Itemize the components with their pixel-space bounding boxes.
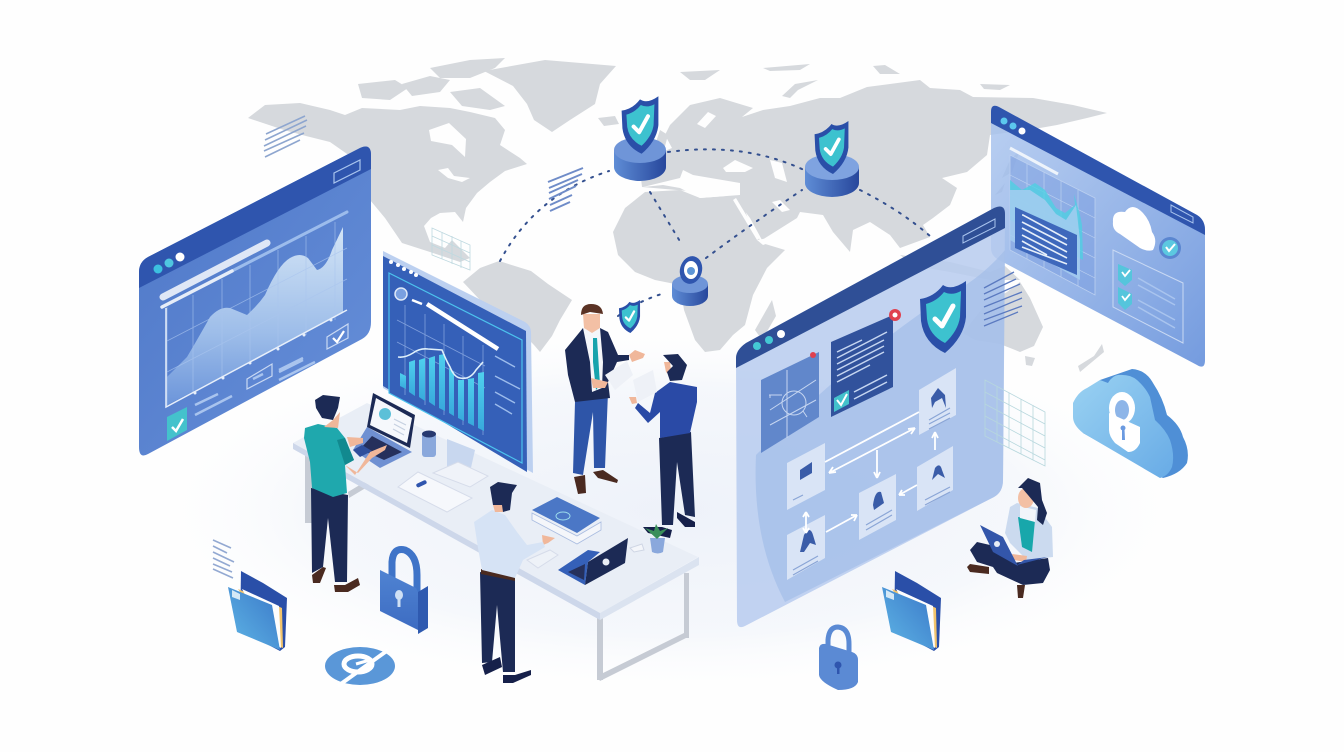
- panel: upper right window: [991, 106, 1205, 367]
- hand: [591, 350, 645, 388]
- icon: padlock bottom: [819, 627, 858, 690]
- flow card icons: [800, 388, 946, 552]
- belt: [481, 569, 515, 581]
- window button: [334, 160, 360, 183]
- routes: [500, 149, 930, 316]
- paper: [633, 370, 657, 402]
- magnifier card: [761, 352, 819, 453]
- jacket: [565, 328, 629, 402]
- window button: [1171, 205, 1193, 223]
- header bars: [162, 212, 347, 307]
- africa: [613, 190, 785, 352]
- shoes: [482, 657, 531, 683]
- icon: folder left: [228, 571, 287, 651]
- cloud icon: [1113, 207, 1155, 251]
- legs: [573, 392, 608, 475]
- caption lines near australia: [984, 272, 1022, 326]
- inland seas: [429, 112, 790, 245]
- area chart: [166, 222, 347, 407]
- text card: [831, 309, 901, 417]
- check buttons: [167, 324, 348, 441]
- tablet: [527, 550, 558, 568]
- small caption lines top left: [264, 116, 307, 157]
- hands: [1012, 554, 1027, 562]
- shirt and tie: [583, 328, 603, 392]
- japan: [995, 150, 1020, 195]
- small teal grid: [432, 228, 470, 270]
- south america: [463, 261, 572, 352]
- window button: [963, 219, 995, 243]
- jacket: [1005, 503, 1053, 560]
- laptop: back view: [558, 538, 628, 585]
- shoes: [574, 470, 618, 494]
- window dots: [753, 330, 785, 350]
- shoes: [312, 567, 360, 592]
- window dots: [154, 252, 184, 274]
- laptop: [980, 525, 1018, 566]
- greenland: [484, 60, 616, 132]
- calendar grid: [985, 380, 1045, 466]
- monitor stand: [433, 439, 488, 487]
- arctic islets east: [680, 64, 1010, 98]
- flow cards: [787, 368, 956, 580]
- australia and indonesia: [900, 255, 1043, 352]
- window dots: [389, 260, 418, 277]
- head: [1018, 488, 1034, 508]
- person: blue shirt man: [629, 354, 697, 538]
- small caption lines centre: [548, 168, 583, 211]
- data card: [1015, 207, 1077, 275]
- caption lines left: [213, 540, 234, 578]
- desk top: [293, 403, 698, 613]
- person: white shirt man: [474, 482, 558, 683]
- books: [532, 497, 601, 544]
- window dots: [1000, 118, 1026, 134]
- icon: cloud lock: [1073, 369, 1188, 478]
- person: seated woman: [967, 478, 1053, 598]
- node: west shield: [614, 96, 666, 181]
- cup: [422, 430, 436, 457]
- torso: [304, 424, 354, 497]
- torso: [635, 382, 697, 438]
- search bar: [395, 288, 498, 349]
- person: suited man: [565, 304, 645, 494]
- arms: [345, 437, 387, 475]
- legs: [970, 542, 1050, 585]
- head: [664, 362, 672, 378]
- icon: round emblem: [325, 647, 395, 686]
- panel: data flow window: [736, 206, 1005, 627]
- laptop: teal worker: [353, 393, 415, 468]
- node: africa beacon: [672, 254, 708, 306]
- highlight blob: [756, 250, 1005, 602]
- head: [583, 314, 600, 333]
- legs: [311, 488, 348, 582]
- hand: [542, 535, 555, 545]
- legs: [480, 572, 515, 672]
- screen frame: [389, 273, 522, 463]
- desk legs: [305, 455, 689, 681]
- window header: [736, 206, 1005, 368]
- status badge: [1159, 237, 1181, 259]
- padlock: [1109, 392, 1140, 452]
- arctic islands: [358, 58, 505, 110]
- top: [1018, 517, 1035, 552]
- big shield: [920, 281, 966, 353]
- world map: [248, 58, 1107, 372]
- eurasia: [640, 80, 1107, 252]
- hand: [629, 397, 637, 404]
- north america: [248, 103, 527, 262]
- sleeve: [337, 438, 354, 465]
- iceland and uk: [598, 116, 668, 150]
- bar chart: [400, 354, 484, 431]
- flow card lines: [793, 408, 950, 575]
- desk: [293, 403, 699, 681]
- monitor: [383, 251, 533, 473]
- icon: padlock centre: [380, 550, 428, 634]
- side list: [495, 356, 520, 414]
- paper: [605, 361, 633, 390]
- shoes: [643, 512, 695, 538]
- plant: [645, 524, 668, 554]
- head: [324, 412, 340, 428]
- floor shadow: [130, 320, 1210, 700]
- panel: analytics window: [139, 147, 371, 455]
- head: [493, 505, 503, 512]
- chart grid: [397, 305, 485, 435]
- notepad: [398, 472, 472, 512]
- new zealand and tasmania: [1025, 344, 1104, 372]
- node: east shield: [805, 121, 859, 197]
- shoes: [967, 564, 1025, 598]
- person: teal shirt worker: [304, 395, 387, 592]
- chart grid: [1010, 148, 1095, 295]
- flow arrows: [803, 412, 938, 533]
- checklist box: [1113, 250, 1183, 343]
- legs: [659, 432, 695, 525]
- torso: [474, 510, 545, 578]
- madagascar: [755, 300, 776, 340]
- mug: [630, 544, 644, 552]
- icon: folder right: [882, 571, 941, 651]
- trend line: [398, 349, 483, 378]
- small shield: [619, 300, 640, 333]
